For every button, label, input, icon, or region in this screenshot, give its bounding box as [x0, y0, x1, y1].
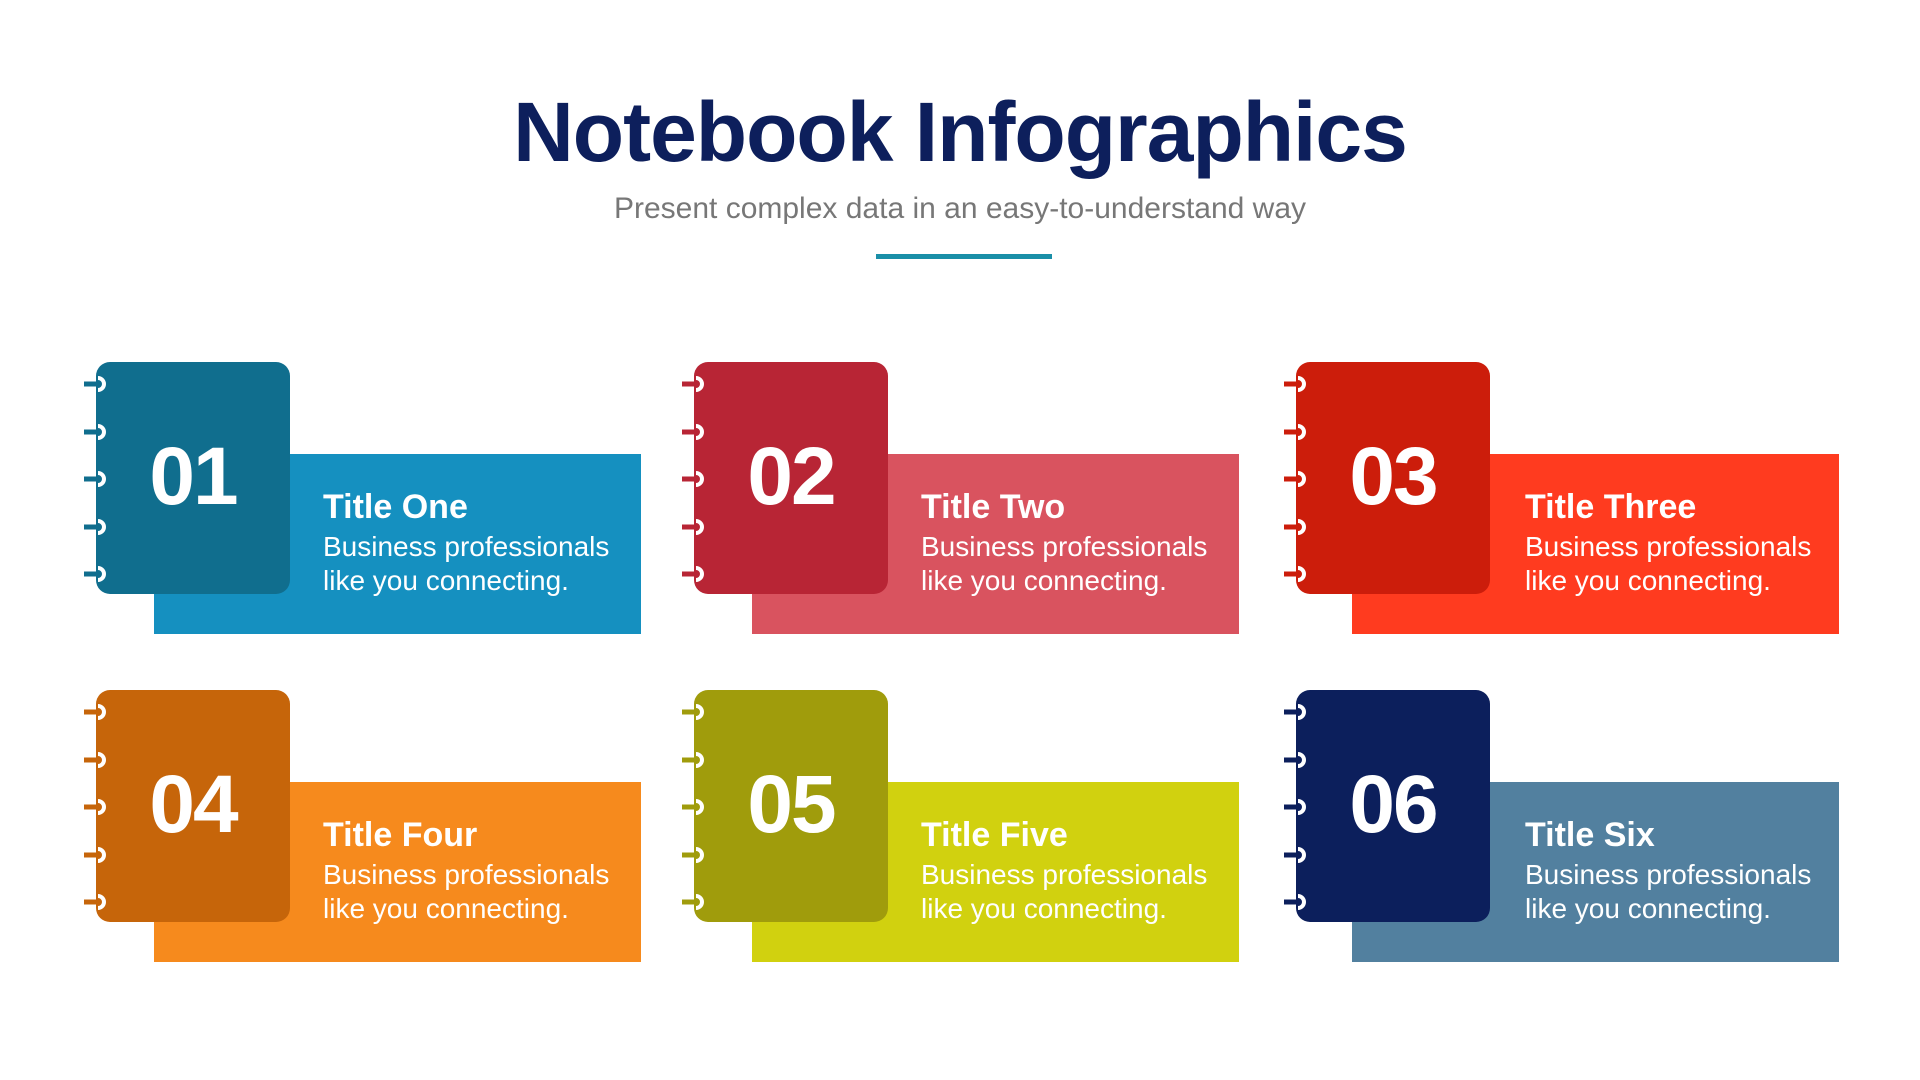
- text 02: [921, 488, 1207, 596]
- card 02: Title Two: [921, 488, 1065, 526]
- notebook 06: [1296, 690, 1490, 922]
- card 05: Title Five: [921, 816, 1068, 854]
- card 03: Title Three: [1525, 488, 1696, 526]
- card 01: like you connecting.: [323, 565, 569, 596]
- bar 02: [752, 454, 1239, 634]
- bar 04: [154, 782, 641, 962]
- notebook 01: [96, 362, 290, 594]
- card 05: like you connecting.: [921, 893, 1167, 924]
- card 04: Business professionals: [323, 859, 609, 890]
- card 05: Business professionals: [921, 859, 1207, 890]
- text 05: [921, 816, 1207, 924]
- notebook 03: [1296, 362, 1490, 594]
- card 03: [1284, 362, 1839, 634]
- card 01: Title One: [323, 488, 468, 526]
- bar 05: [752, 782, 1239, 962]
- card 06: [1284, 690, 1839, 962]
- card 04: like you connecting.: [323, 893, 569, 924]
- subtitle: Present complex data in an easy-to-understand way: [614, 192, 1306, 225]
- notebook 05: 05: [747, 759, 835, 850]
- notebook 01: 01: [149, 431, 237, 522]
- card 04: [84, 690, 641, 962]
- card 01: Business professionals: [323, 531, 609, 562]
- bar 03: [1352, 454, 1839, 634]
- card 06: like you connecting.: [1525, 893, 1771, 924]
- underline accent: [876, 254, 1052, 259]
- text 01: [323, 488, 609, 596]
- card 02: Business professionals: [921, 531, 1207, 562]
- text 04: [323, 816, 609, 924]
- notebook 02: [694, 362, 888, 594]
- notebook 06: 06: [1349, 759, 1437, 850]
- notebook 04: 04: [149, 759, 237, 850]
- bar 01: [154, 454, 641, 634]
- bar 06: [1352, 782, 1839, 962]
- card 06: Title Six: [1525, 816, 1655, 854]
- card 05: [682, 690, 1239, 962]
- card 04: Title Four: [323, 816, 477, 854]
- notebook 04: [96, 690, 290, 922]
- text 03: [1525, 488, 1811, 596]
- card 03: Business professionals: [1525, 531, 1811, 562]
- card 02: like you connecting.: [921, 565, 1167, 596]
- notebook 02: 02: [747, 431, 835, 522]
- card 01: [84, 362, 641, 634]
- notebook 03: 03: [1349, 431, 1437, 522]
- text 06: [1525, 816, 1811, 924]
- card 02: [682, 362, 1239, 634]
- card 03: like you connecting.: [1525, 565, 1771, 596]
- card 06: Business professionals: [1525, 859, 1811, 890]
- notebook 05: [694, 690, 888, 922]
- title: Notebook Infographics: [513, 85, 1407, 179]
